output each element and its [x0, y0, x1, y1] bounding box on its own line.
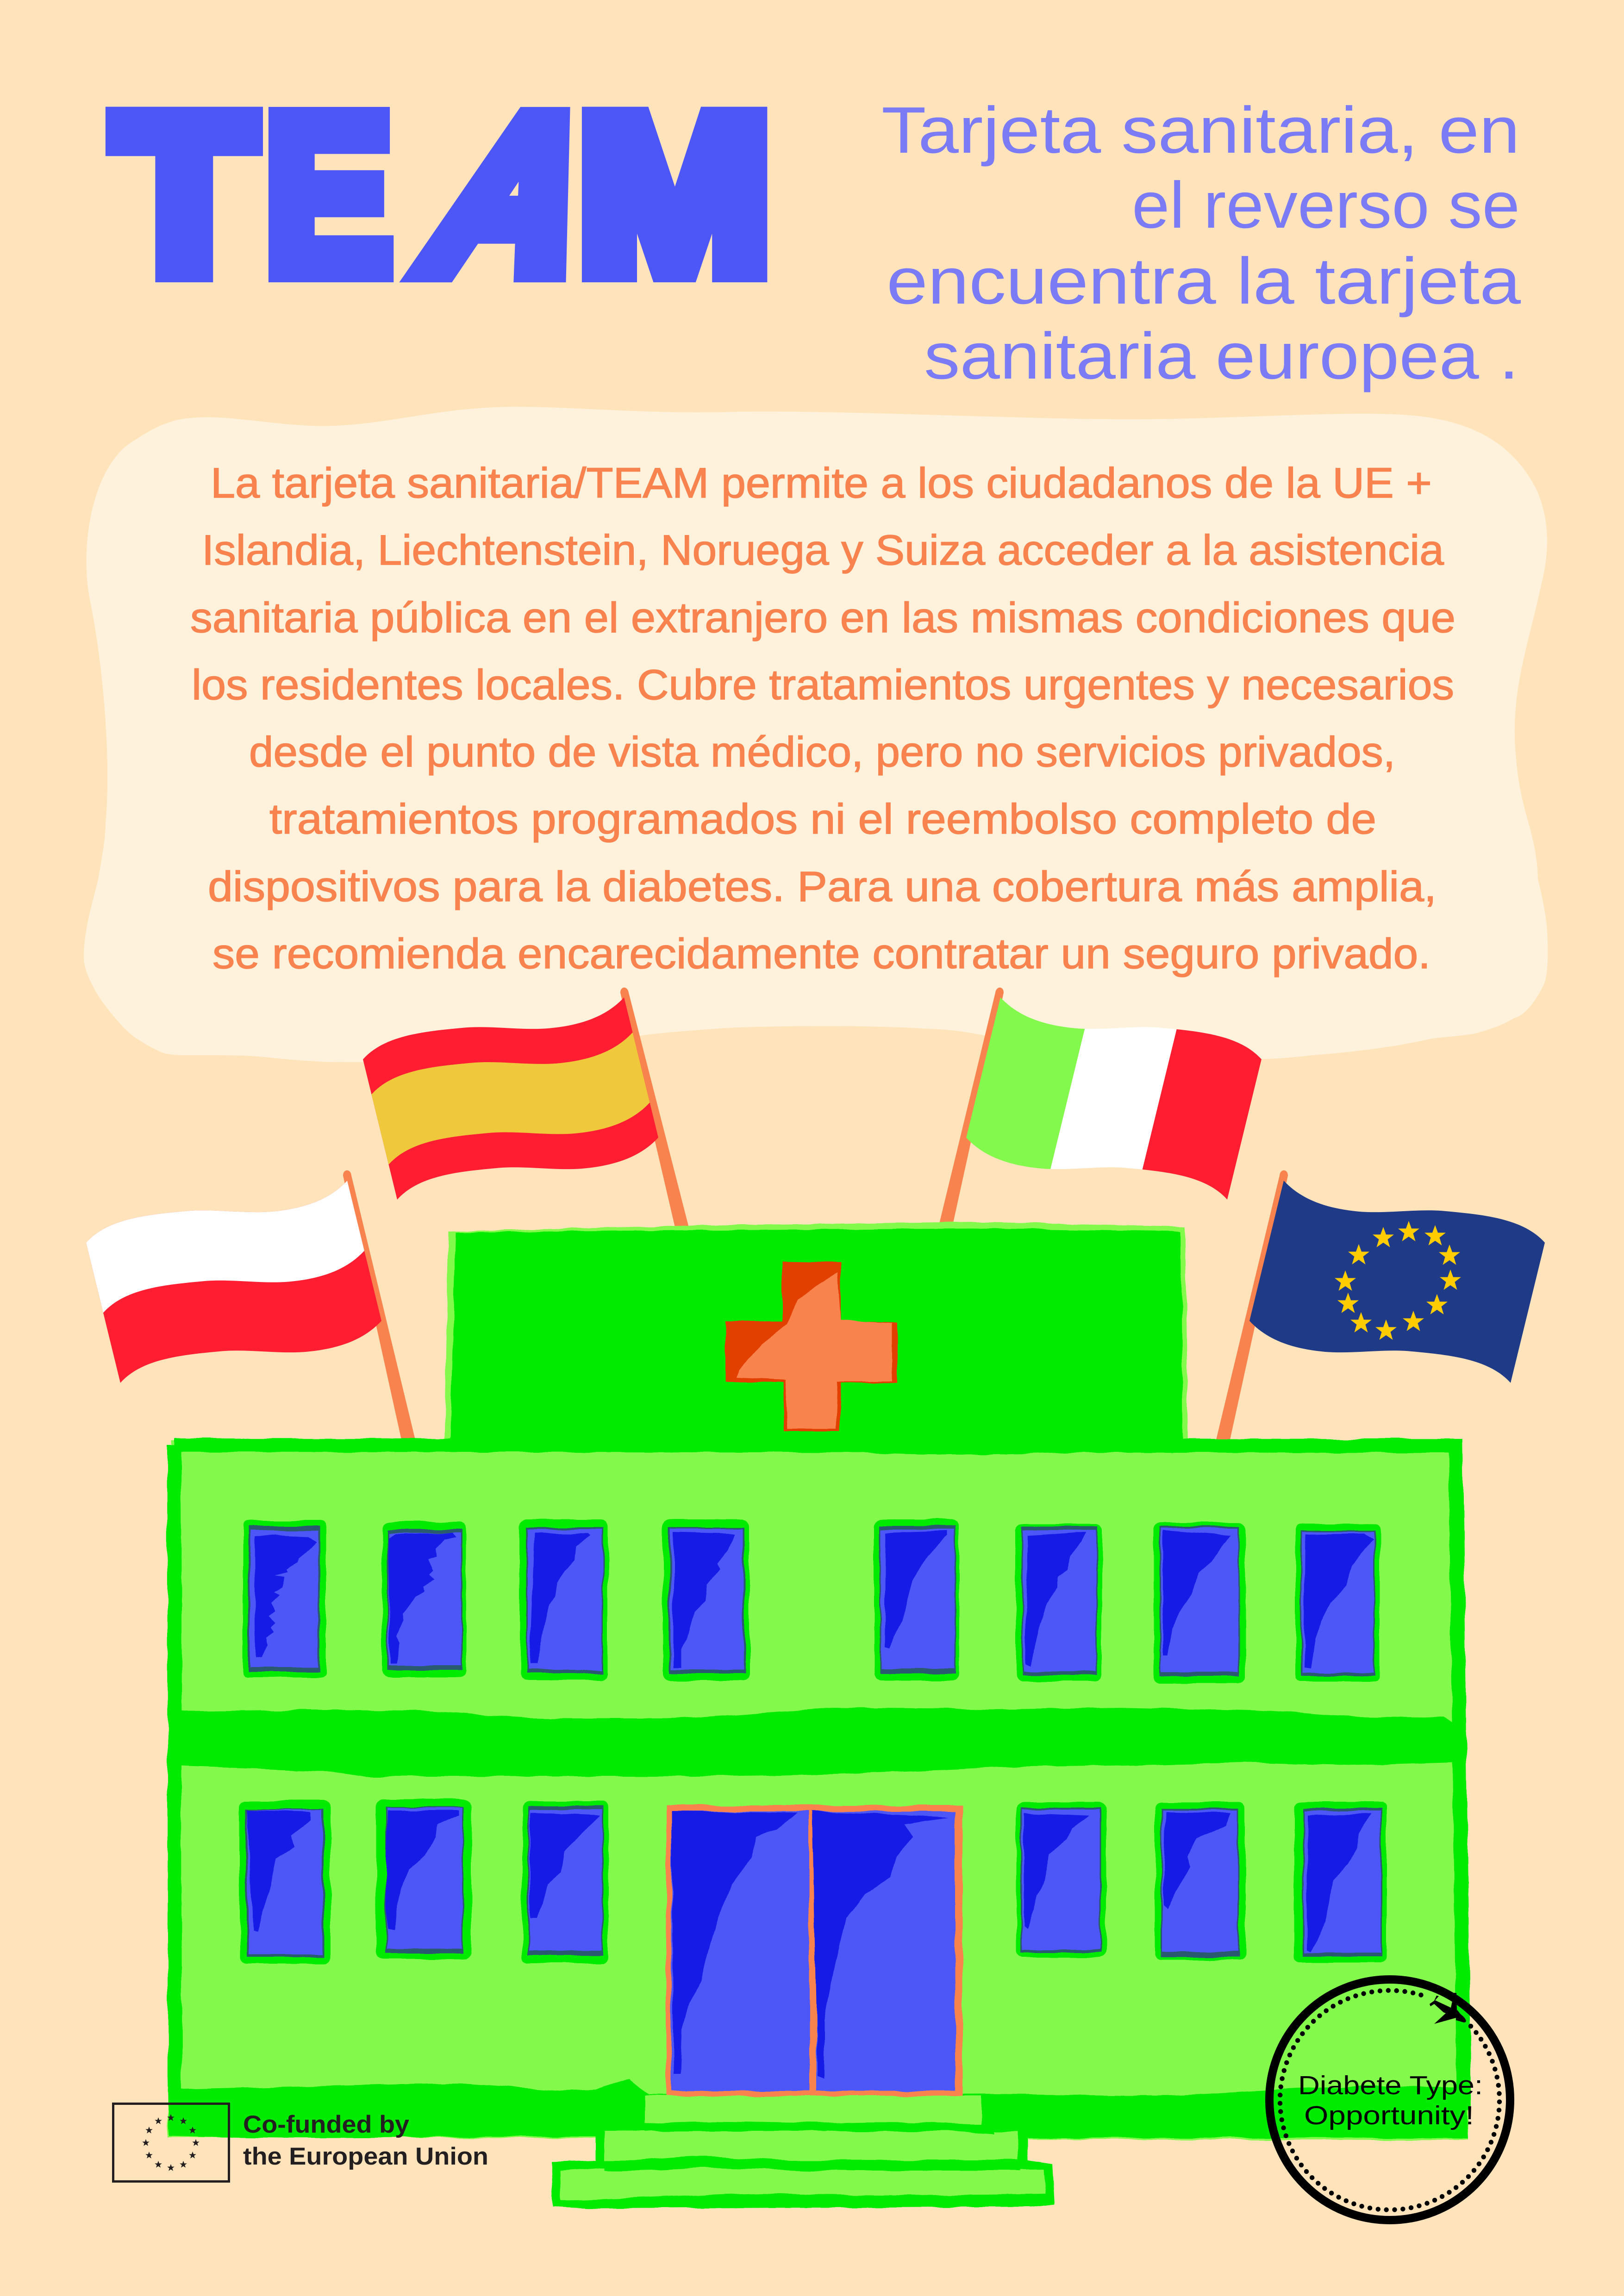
badge text: Diabete Type:: [1298, 2071, 1483, 2100]
subtitle: Tarjeta sanitaria, en: [881, 93, 1520, 167]
upper block: [444, 1222, 1188, 1454]
door: [666, 1805, 962, 2097]
subtitle: [881, 93, 1521, 393]
flag poles: [343, 988, 1288, 1442]
window 9: [239, 1801, 331, 1964]
main facade: [168, 1439, 1468, 2140]
subtitle: el reverso se: [1132, 168, 1520, 242]
window 2: [382, 1522, 466, 1678]
middle band: [168, 1707, 1462, 1776]
panel: description blob: [84, 407, 1548, 1062]
step 3: [551, 2160, 1055, 2209]
badge ring: [1269, 1979, 1510, 2220]
body text: La tarjeta sanitaria/TEAM permite a los ciudadanos de la UE +: [211, 460, 1432, 507]
window 7: [1154, 1523, 1245, 1684]
window 1: [243, 1521, 326, 1677]
window 11: [522, 1802, 608, 1963]
roof join: [450, 1437, 1183, 1455]
title: TEAM: E: [265, 70, 392, 318]
flag: European Union: [1246, 1168, 1548, 1397]
bottom band: [168, 2079, 1468, 2139]
step 1: [645, 2096, 981, 2124]
logo text: Co-funded by: [243, 2111, 410, 2138]
logo text: the European Union: [243, 2143, 488, 2170]
badge text: [1298, 2071, 1483, 2130]
body text: desde el punto de vista médico, pero no servicios privados,: [249, 728, 1395, 776]
window 8: [1296, 1524, 1380, 1681]
body text: [190, 460, 1455, 977]
step 2 stroke: [605, 2156, 1021, 2171]
badge text: Opportunity!: [1304, 2101, 1474, 2130]
step 2: [596, 2129, 1028, 2166]
icon: airplane: [1430, 1993, 1466, 2024]
window 10: [376, 1799, 472, 1959]
step 1 stroke: [645, 2122, 994, 2134]
window 4: [663, 1519, 750, 1680]
title: TEAM: [116, 70, 769, 318]
title: TEAM: M: [580, 72, 769, 317]
logo stars: [142, 2114, 200, 2171]
badge: Diabete Type Opportunity: [1269, 1979, 1510, 2220]
flag: Poland: [83, 1168, 385, 1397]
body text: se recomienda encarecidamente contratar un seguro privado.: [212, 930, 1430, 977]
body text: dispositivos para la diabetes. Para una cobertura más amplia,: [208, 863, 1437, 910]
steps: [551, 2096, 1055, 2209]
flag: Italy: [966, 997, 1262, 1200]
hospital building: [168, 1222, 1468, 2209]
window 5: [874, 1519, 959, 1680]
window 6: [1016, 1524, 1102, 1681]
logo text: [243, 2111, 488, 2170]
subtitle: sanitaria europea .: [924, 319, 1519, 393]
windows: lower row: [239, 1799, 1387, 1964]
facade border: [174, 1445, 1464, 2110]
logo box: [113, 2104, 229, 2182]
subtitle: encuentra la tarjeta: [887, 244, 1521, 318]
title: TEAM: A: [398, 71, 631, 317]
body text: Islandia, Liechtenstein, Noruega y Suiza acceder a la asistencia: [202, 527, 1444, 574]
title: TEAM: T: [116, 72, 253, 317]
flag: Spain: [360, 985, 662, 1214]
window 14: [1294, 1802, 1387, 1962]
badge dotted circle: [1280, 1991, 1499, 2210]
cross: [725, 1261, 897, 1431]
windows: upper row: [243, 1519, 1380, 1684]
step 3 face: [560, 2167, 1045, 2200]
body text: sanitaria pública en el extranjero en las mismas condiciones que: [190, 594, 1455, 641]
body text: tratamientos programados ni el reembolso completo de: [269, 796, 1376, 843]
window 13: [1155, 1802, 1245, 1960]
logo: co-funded by the European Union: [113, 2104, 488, 2182]
window 3: [520, 1519, 608, 1680]
body text: los residentes locales. Cubre tratamientos urgentes y necesarios: [192, 661, 1454, 709]
window 12: [1017, 1802, 1106, 1957]
step 2 face: [605, 2131, 1018, 2166]
